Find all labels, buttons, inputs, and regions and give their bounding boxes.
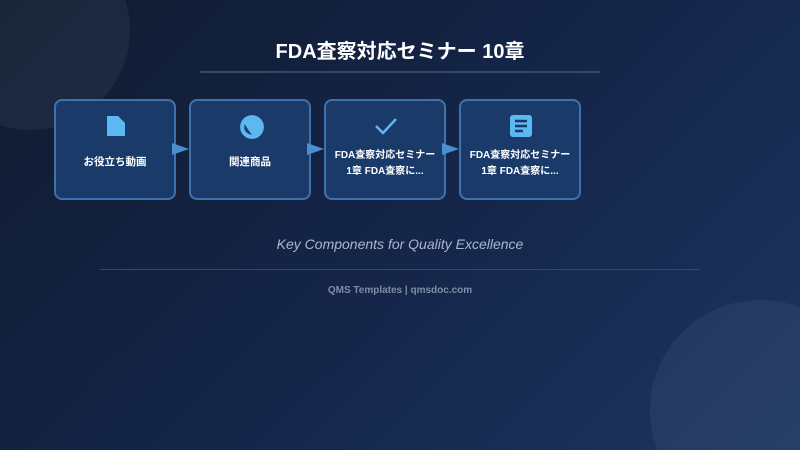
card 3: FDA査察対応セミナー	[335, 150, 435, 161]
footer: QMS Templates | qmsdoc.com	[328, 285, 472, 296]
subtitle: Key Components for Quality Excellence	[277, 236, 523, 252]
title: FDA査察対応セミナー 10章	[276, 41, 524, 63]
icon: check	[375, 118, 397, 135]
card 3	[324, 99, 446, 200]
card 4: FDA査察対応セミナー	[470, 150, 570, 161]
arrow 2	[307, 143, 324, 155]
card 1	[54, 99, 176, 200]
card 3: 1章 FDA査察に...	[346, 166, 424, 177]
icon: file	[107, 116, 125, 136]
card 2: 関連商品	[229, 156, 271, 168]
card 4: 1章 FDA査察に...	[481, 166, 559, 177]
arrow 1	[172, 143, 189, 155]
card 4	[459, 99, 581, 200]
card 1: お役立ち動画	[84, 156, 146, 168]
icon: globe	[240, 115, 264, 139]
arrow 3	[442, 143, 459, 155]
icon: document	[510, 115, 532, 137]
card 2	[189, 99, 311, 200]
